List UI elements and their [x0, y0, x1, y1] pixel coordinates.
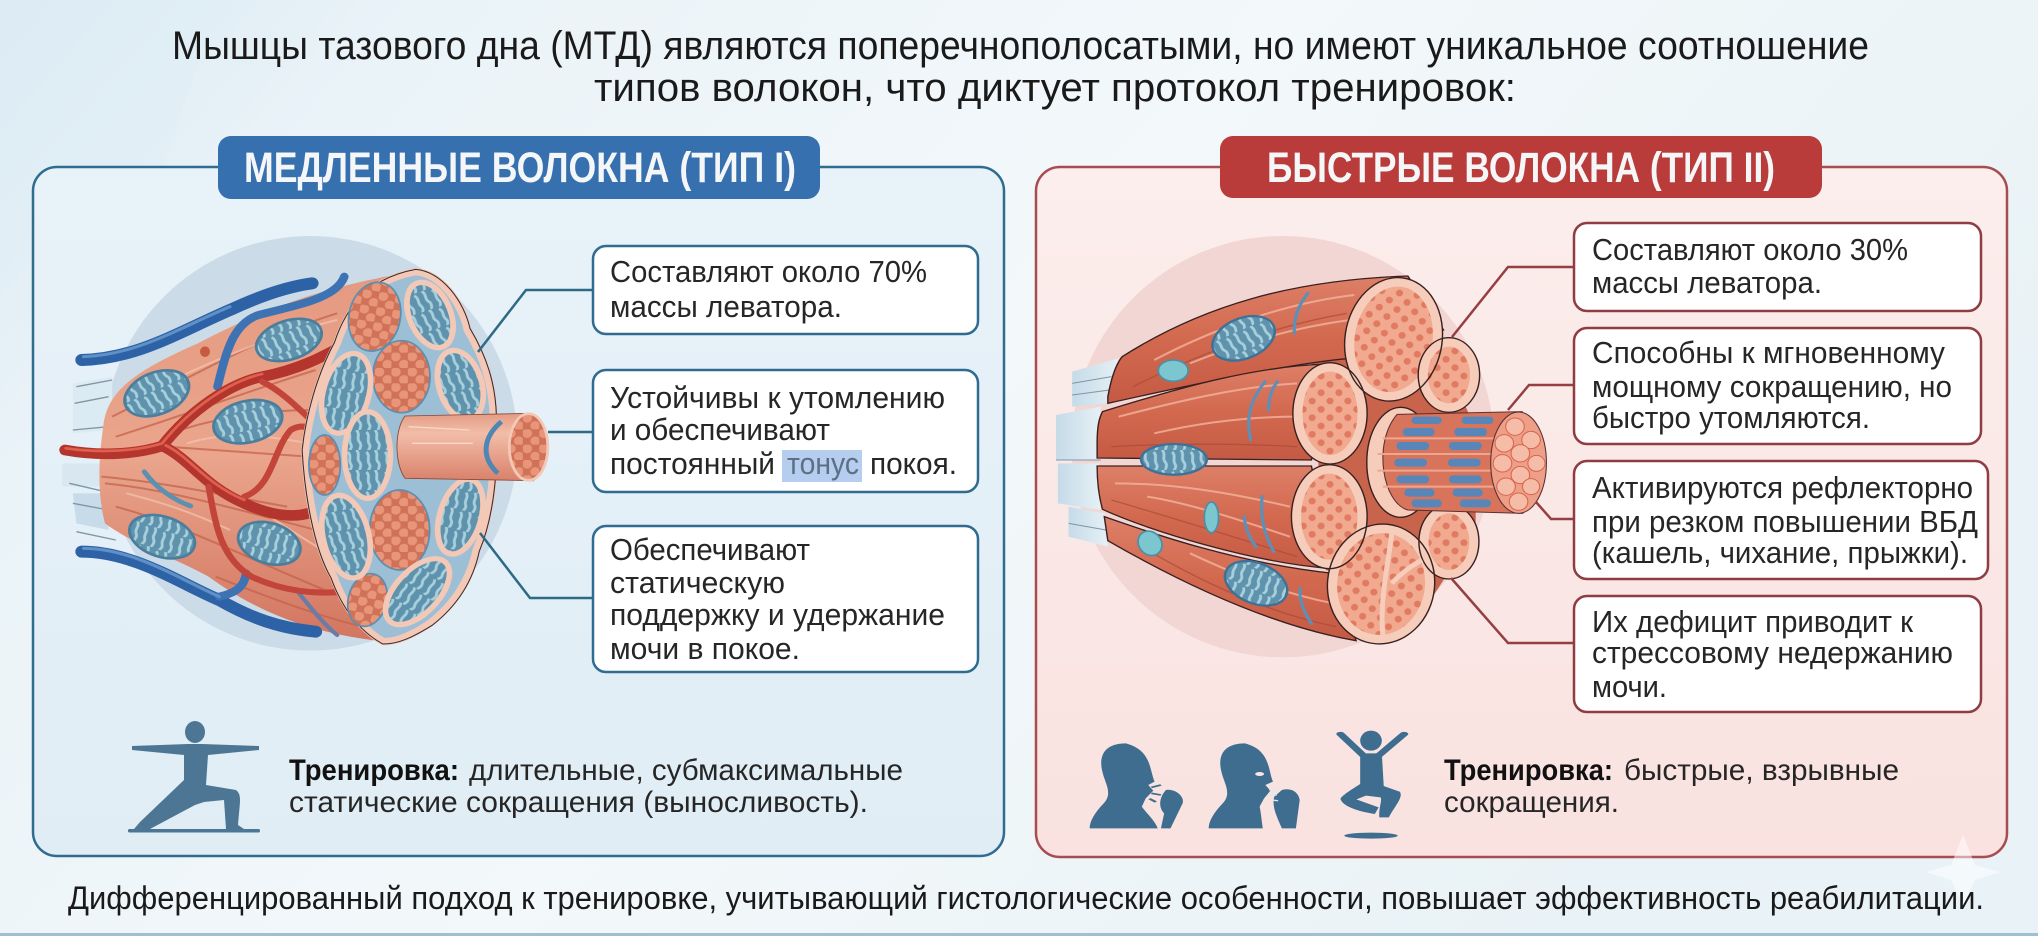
icon: sneezing person: [1209, 743, 1300, 828]
heading badge: slow fibers: МЕДЛЕННЫЕ ВОЛОКНА (ТИП I): [244, 144, 796, 192]
callout: static support: статическую: [610, 565, 785, 600]
callout: instant contraction: быстро утомляются.: [1592, 400, 1870, 435]
orange fascicles: [309, 278, 430, 630]
callout: stress incontinence: [1574, 596, 1981, 712]
icons: cough, sneeze, jump: [1090, 731, 1404, 839]
callout: 30 percent: [1574, 223, 1981, 311]
fiber cross sections: [1296, 277, 1475, 643]
heading badge: fast fibers: БЫСТРЫЕ ВОЛОКНА (ТИП II): [1267, 144, 1775, 192]
muscle backing: [1311, 330, 1476, 597]
callout: fatigue resistance: Устойчивы к утомлению: [610, 380, 945, 415]
callout: instant contraction: мощному сокращению, но: [1592, 369, 1952, 404]
blood vessels: [65, 277, 355, 635]
title: типов волокон, что диктует протокол тренировок:: [594, 66, 1516, 110]
callout: stress incontinence: Их дефицит приводит к: [1592, 604, 1913, 639]
callout: 30 percent: Составляют около 30%: [1592, 232, 1908, 267]
callout: static support: Обеспечивают: [610, 532, 810, 567]
central extracted fiber: [1367, 407, 1435, 517]
callout: fatigue resistance: [593, 370, 978, 492]
title: Мышцы тазового дна (МТД) являются поперечнополосатыми, но имеют уникальное соотношение: [172, 24, 1869, 68]
blue streaks: [1244, 293, 1311, 623]
title: [172, 24, 1869, 110]
sarcomere bands: [1394, 417, 1494, 507]
callout: instant contraction: [1574, 328, 1981, 444]
training text: fast fibers: [1444, 754, 1899, 819]
callout: 30 percent: массы леватора.: [1592, 265, 1822, 300]
callout: reflex activation: (кашель, чихание, прыжки).: [1592, 535, 1968, 570]
callout: 70 percent: [593, 246, 978, 334]
callout: stress incontinence: стрессовому недержанию: [1592, 635, 1953, 670]
callout: fatigue resistance: и обеспечивают: [610, 412, 830, 447]
callout: static support: мочи в покое.: [610, 631, 800, 666]
panel: slow fibers type I: [33, 136, 1004, 856]
footer statement: Дифференцированный подход к тренировке, учитывающий гистологические особенности, повышает эффективность реабилитации.: [68, 880, 1984, 916]
training text: slow fibers: длительные, субмаксимальные: [469, 754, 903, 787]
callout: reflex activation: при резком повышении ВБД: [1592, 504, 1978, 539]
heading badge: fast fibers: [1220, 136, 1822, 198]
icon: jumping person: [1340, 731, 1404, 839]
training text: slow fibers: [289, 754, 903, 819]
training text: fast fibers: быстрые, взрывные: [1624, 754, 1899, 787]
callout: static support: поддержку и удержание: [610, 597, 945, 632]
callout: reflex activation: Активируются рефлекторно: [1592, 470, 1973, 505]
callout: reflex activation: [1574, 461, 1988, 579]
illustration: fast muscle fiber bundle: [1056, 236, 1546, 657]
training text: slow fibers: Тренировка:: [289, 754, 459, 787]
callout: 70 percent: Составляют около 70%: [610, 254, 927, 289]
extracted fiber tube: [397, 413, 534, 481]
training text: slow fibers: статические сокращения (выносливость).: [289, 786, 868, 819]
cross section: [305, 272, 494, 642]
heading badge: slow fibers: [218, 136, 820, 199]
mitochondria on surface: [117, 311, 328, 572]
training text: fast fibers: сокращения.: [1444, 786, 1619, 819]
panel frame: [1036, 167, 2007, 857]
training text: fast fibers: Тренировка:: [1444, 754, 1613, 787]
mitochondria and nuclei: [1141, 307, 1295, 614]
connector lines: [1451, 267, 1574, 643]
blue fascicles: [313, 276, 491, 635]
illustration: slow muscle fiber bundle: [62, 236, 548, 651]
muscle fiber bundles: [1097, 276, 1444, 641]
callout: instant contraction: Способны к мгновенному: [1592, 335, 1945, 370]
callout: 70 percent: массы леватора.: [610, 289, 842, 324]
callout: fatigue resistance: постоянный: [610, 446, 775, 481]
callout: stress incontinence: мочи.: [1592, 669, 1667, 704]
callout: fatigue resistance: тонус: [787, 446, 859, 481]
sparkle watermark: [1926, 835, 2000, 905]
panel frame: [33, 167, 1004, 856]
panel: fast fibers type II: [1036, 136, 2007, 857]
icon: coughing person: [1090, 743, 1183, 828]
icon: warrior yoga pose: [128, 721, 260, 832]
connector lines: [478, 290, 593, 598]
callout: static support: [593, 526, 978, 672]
callout: fatigue resistance: покоя.: [870, 446, 957, 481]
